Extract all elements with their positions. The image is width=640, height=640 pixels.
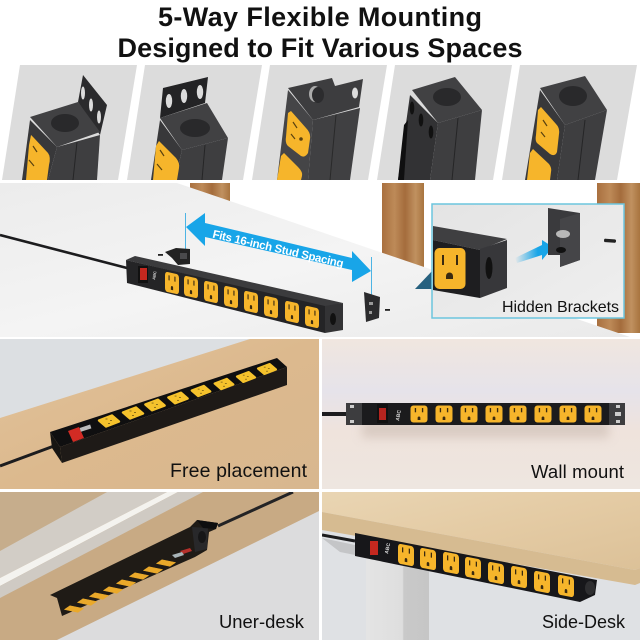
callout pointer bbox=[415, 270, 433, 289]
panel: mounting option 4, back view bbox=[377, 65, 512, 180]
strip shadow bbox=[362, 420, 609, 438]
panel: mounting option 1, side bracket bbox=[2, 65, 137, 180]
arrow: 16-inch span bbox=[186, 213, 371, 282]
icon: right bracket bbox=[364, 292, 390, 322]
stud spacing guide lines bbox=[186, 213, 372, 300]
power cord bbox=[0, 446, 54, 466]
power strip: ABC bbox=[151, 271, 158, 280]
arrow: to bracket bbox=[515, 240, 553, 263]
power strip bbox=[126, 256, 343, 333]
power strip bbox=[355, 533, 597, 602]
panel: mounting option 5, no bracket bbox=[502, 65, 637, 180]
icon: screw bbox=[604, 239, 616, 243]
wooden studs bbox=[190, 183, 640, 333]
panel: mounting option 2, rear bracket bbox=[127, 65, 262, 180]
power cord bbox=[322, 535, 355, 541]
power strip bbox=[50, 520, 218, 616]
panel: mounting option 3, flat bracket bbox=[252, 65, 387, 180]
panel: wall mount bbox=[322, 339, 640, 489]
label: Uner-desk bbox=[219, 611, 305, 632]
power strip bbox=[362, 403, 609, 425]
arrow label: Fits 16-inch Stud Spacing bbox=[211, 229, 345, 270]
power cord bbox=[0, 235, 127, 268]
callout: hidden brackets bbox=[432, 204, 624, 318]
power cord bbox=[322, 412, 348, 416]
desk top bbox=[322, 492, 640, 585]
cord shadow bbox=[322, 538, 355, 555]
panel: under-desk bbox=[0, 492, 319, 640]
label: Free placement bbox=[170, 460, 308, 482]
title: Designed to Fit Various Spaces bbox=[118, 33, 522, 63]
icon: bracket close-up bbox=[548, 208, 580, 267]
icon: left bracket bbox=[158, 248, 190, 265]
power strip bbox=[50, 358, 287, 463]
panel: side-desk bbox=[322, 492, 640, 640]
desk leg bbox=[402, 566, 429, 640]
power strip: ABC bbox=[395, 409, 403, 421]
panel: stud spacing wall bbox=[0, 183, 640, 337]
label: Wall mount bbox=[531, 461, 624, 482]
mounting ears bbox=[346, 403, 625, 425]
panel: free placement bbox=[0, 339, 319, 489]
power strip: ABC bbox=[384, 542, 392, 554]
label: Side-Desk bbox=[542, 612, 626, 632]
power cord bbox=[218, 492, 293, 526]
title bbox=[118, 2, 522, 63]
strip end close-up bbox=[433, 226, 507, 298]
title: 5-Way Flexible Mounting bbox=[158, 2, 482, 32]
callout label: Hidden Brackets bbox=[502, 299, 619, 316]
